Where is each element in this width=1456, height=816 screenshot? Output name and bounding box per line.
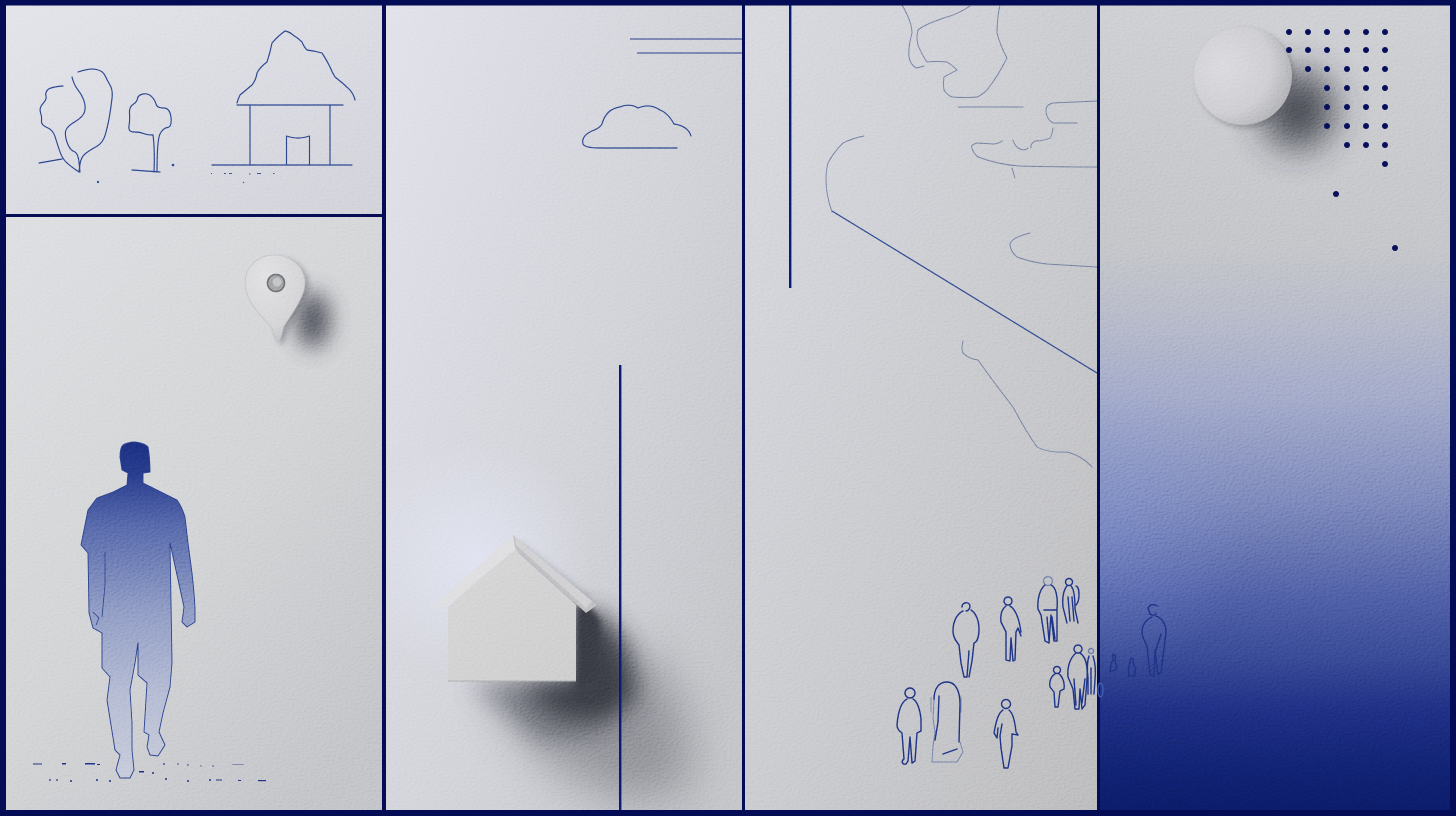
figure group: crowd of sketched people xyxy=(897,576,1095,768)
sphere shadow xyxy=(1197,30,1334,148)
ground specks xyxy=(33,763,266,782)
person xyxy=(1038,576,1057,643)
panel: sphere, dot grid and rising blue gradient xyxy=(1100,5,1450,810)
person xyxy=(1068,645,1087,709)
icon: large tree sketch xyxy=(39,69,112,172)
icon: cloud sketch xyxy=(583,105,691,148)
house shadow xyxy=(470,542,690,800)
panel: winding paths and crowd xyxy=(745,5,1097,810)
person xyxy=(994,700,1018,768)
panel: walking person and location pin xyxy=(6,217,382,810)
figure: walking person silhouette xyxy=(81,442,195,778)
person xyxy=(897,688,921,764)
horizontal rule lines xyxy=(630,39,742,53)
arch-shaped sketched figure xyxy=(931,682,963,762)
person xyxy=(1001,597,1021,661)
person xyxy=(1087,648,1095,694)
icon: location pin xyxy=(245,255,305,341)
icon: small tree sketch xyxy=(97,94,174,183)
contour sketch lines xyxy=(902,5,1097,467)
vertical ink line xyxy=(789,5,791,288)
ground specks xyxy=(211,173,274,183)
panel: village sketch xyxy=(6,5,382,214)
small child figures in blue field xyxy=(1110,654,1135,676)
icon: paper sphere xyxy=(1194,27,1292,125)
person xyxy=(1050,666,1064,707)
person xyxy=(953,603,979,677)
icon: 3D paper house xyxy=(430,535,597,681)
vertical ink line xyxy=(619,365,621,810)
small oval straddling the divider xyxy=(1098,683,1103,697)
panel: paper house xyxy=(386,5,742,810)
diagonal road line with bend xyxy=(826,136,1097,373)
person in blue field xyxy=(1142,605,1166,677)
icon: house sketch with cloud-shaped roof xyxy=(212,31,355,165)
pin shadow xyxy=(275,258,330,348)
person xyxy=(1063,578,1079,623)
dot grid xyxy=(1286,29,1398,251)
